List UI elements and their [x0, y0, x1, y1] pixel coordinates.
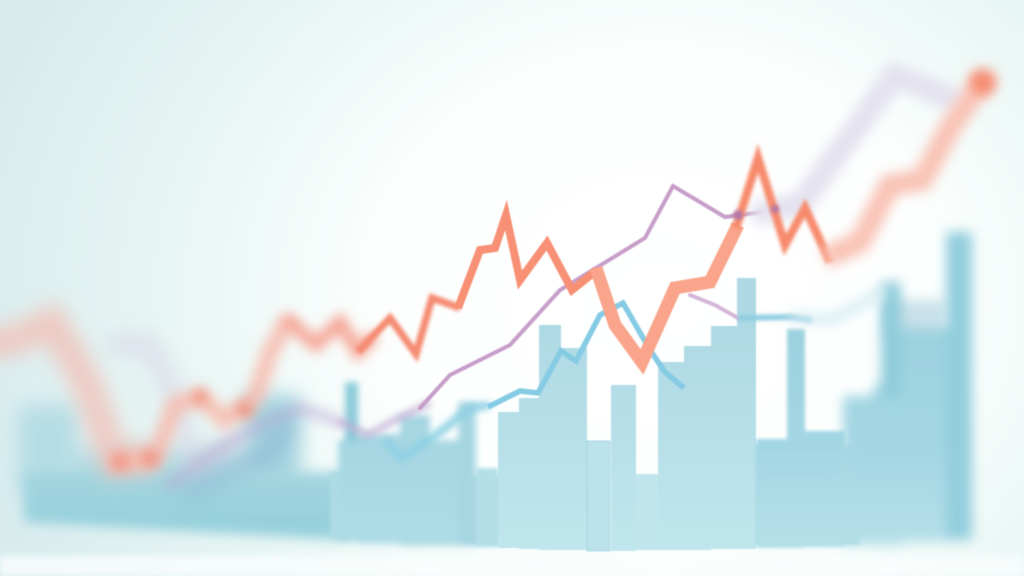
bars: far left upper haze	[18, 395, 300, 500]
orange line: left blurred	[110, 318, 290, 462]
orange line: centre thick	[596, 225, 738, 362]
orange line: left hot spots	[112, 390, 253, 470]
bars: right, progressively blurred	[756, 329, 845, 548]
purple line	[115, 75, 950, 485]
bars: far left base	[24, 472, 345, 540]
orange line: peak	[736, 158, 830, 262]
blue line	[185, 290, 885, 495]
orange line: upper left blurred	[285, 318, 375, 352]
orange line: rising right blurred	[825, 78, 985, 258]
purple line: rising top right	[762, 75, 950, 212]
orange line: end highlight	[970, 69, 996, 95]
purple line: mid blurred	[340, 404, 428, 435]
orange line	[0, 69, 996, 470]
bars: transition to focus	[476, 468, 498, 547]
line crossing marks	[733, 205, 779, 220]
bars: seam underlays	[330, 445, 860, 545]
blue line: far right faint	[790, 290, 885, 320]
blue line: right blurred	[738, 317, 812, 320]
bars: centre, in focus	[498, 278, 756, 551]
blue line: mid blurred	[385, 405, 490, 458]
blue line: left blurred	[185, 420, 295, 495]
orange line: mid	[358, 298, 460, 354]
bars: middle left, blurred	[338, 382, 476, 546]
bars: far right upper haze	[885, 300, 945, 340]
floor highlight	[0, 556, 1024, 576]
purple line: left blurred	[170, 408, 340, 485]
orange line: far left, heavily blurred	[0, 322, 155, 462]
purple line: far left faint	[115, 345, 235, 470]
orange line: centre upper	[458, 215, 597, 308]
purple line: lower branch	[690, 295, 738, 318]
bars: far right, heavily blurred	[843, 232, 972, 545]
blue line: centre sharp	[488, 303, 684, 407]
bar chart	[18, 232, 972, 551]
purple line: centre sharp	[420, 186, 762, 408]
